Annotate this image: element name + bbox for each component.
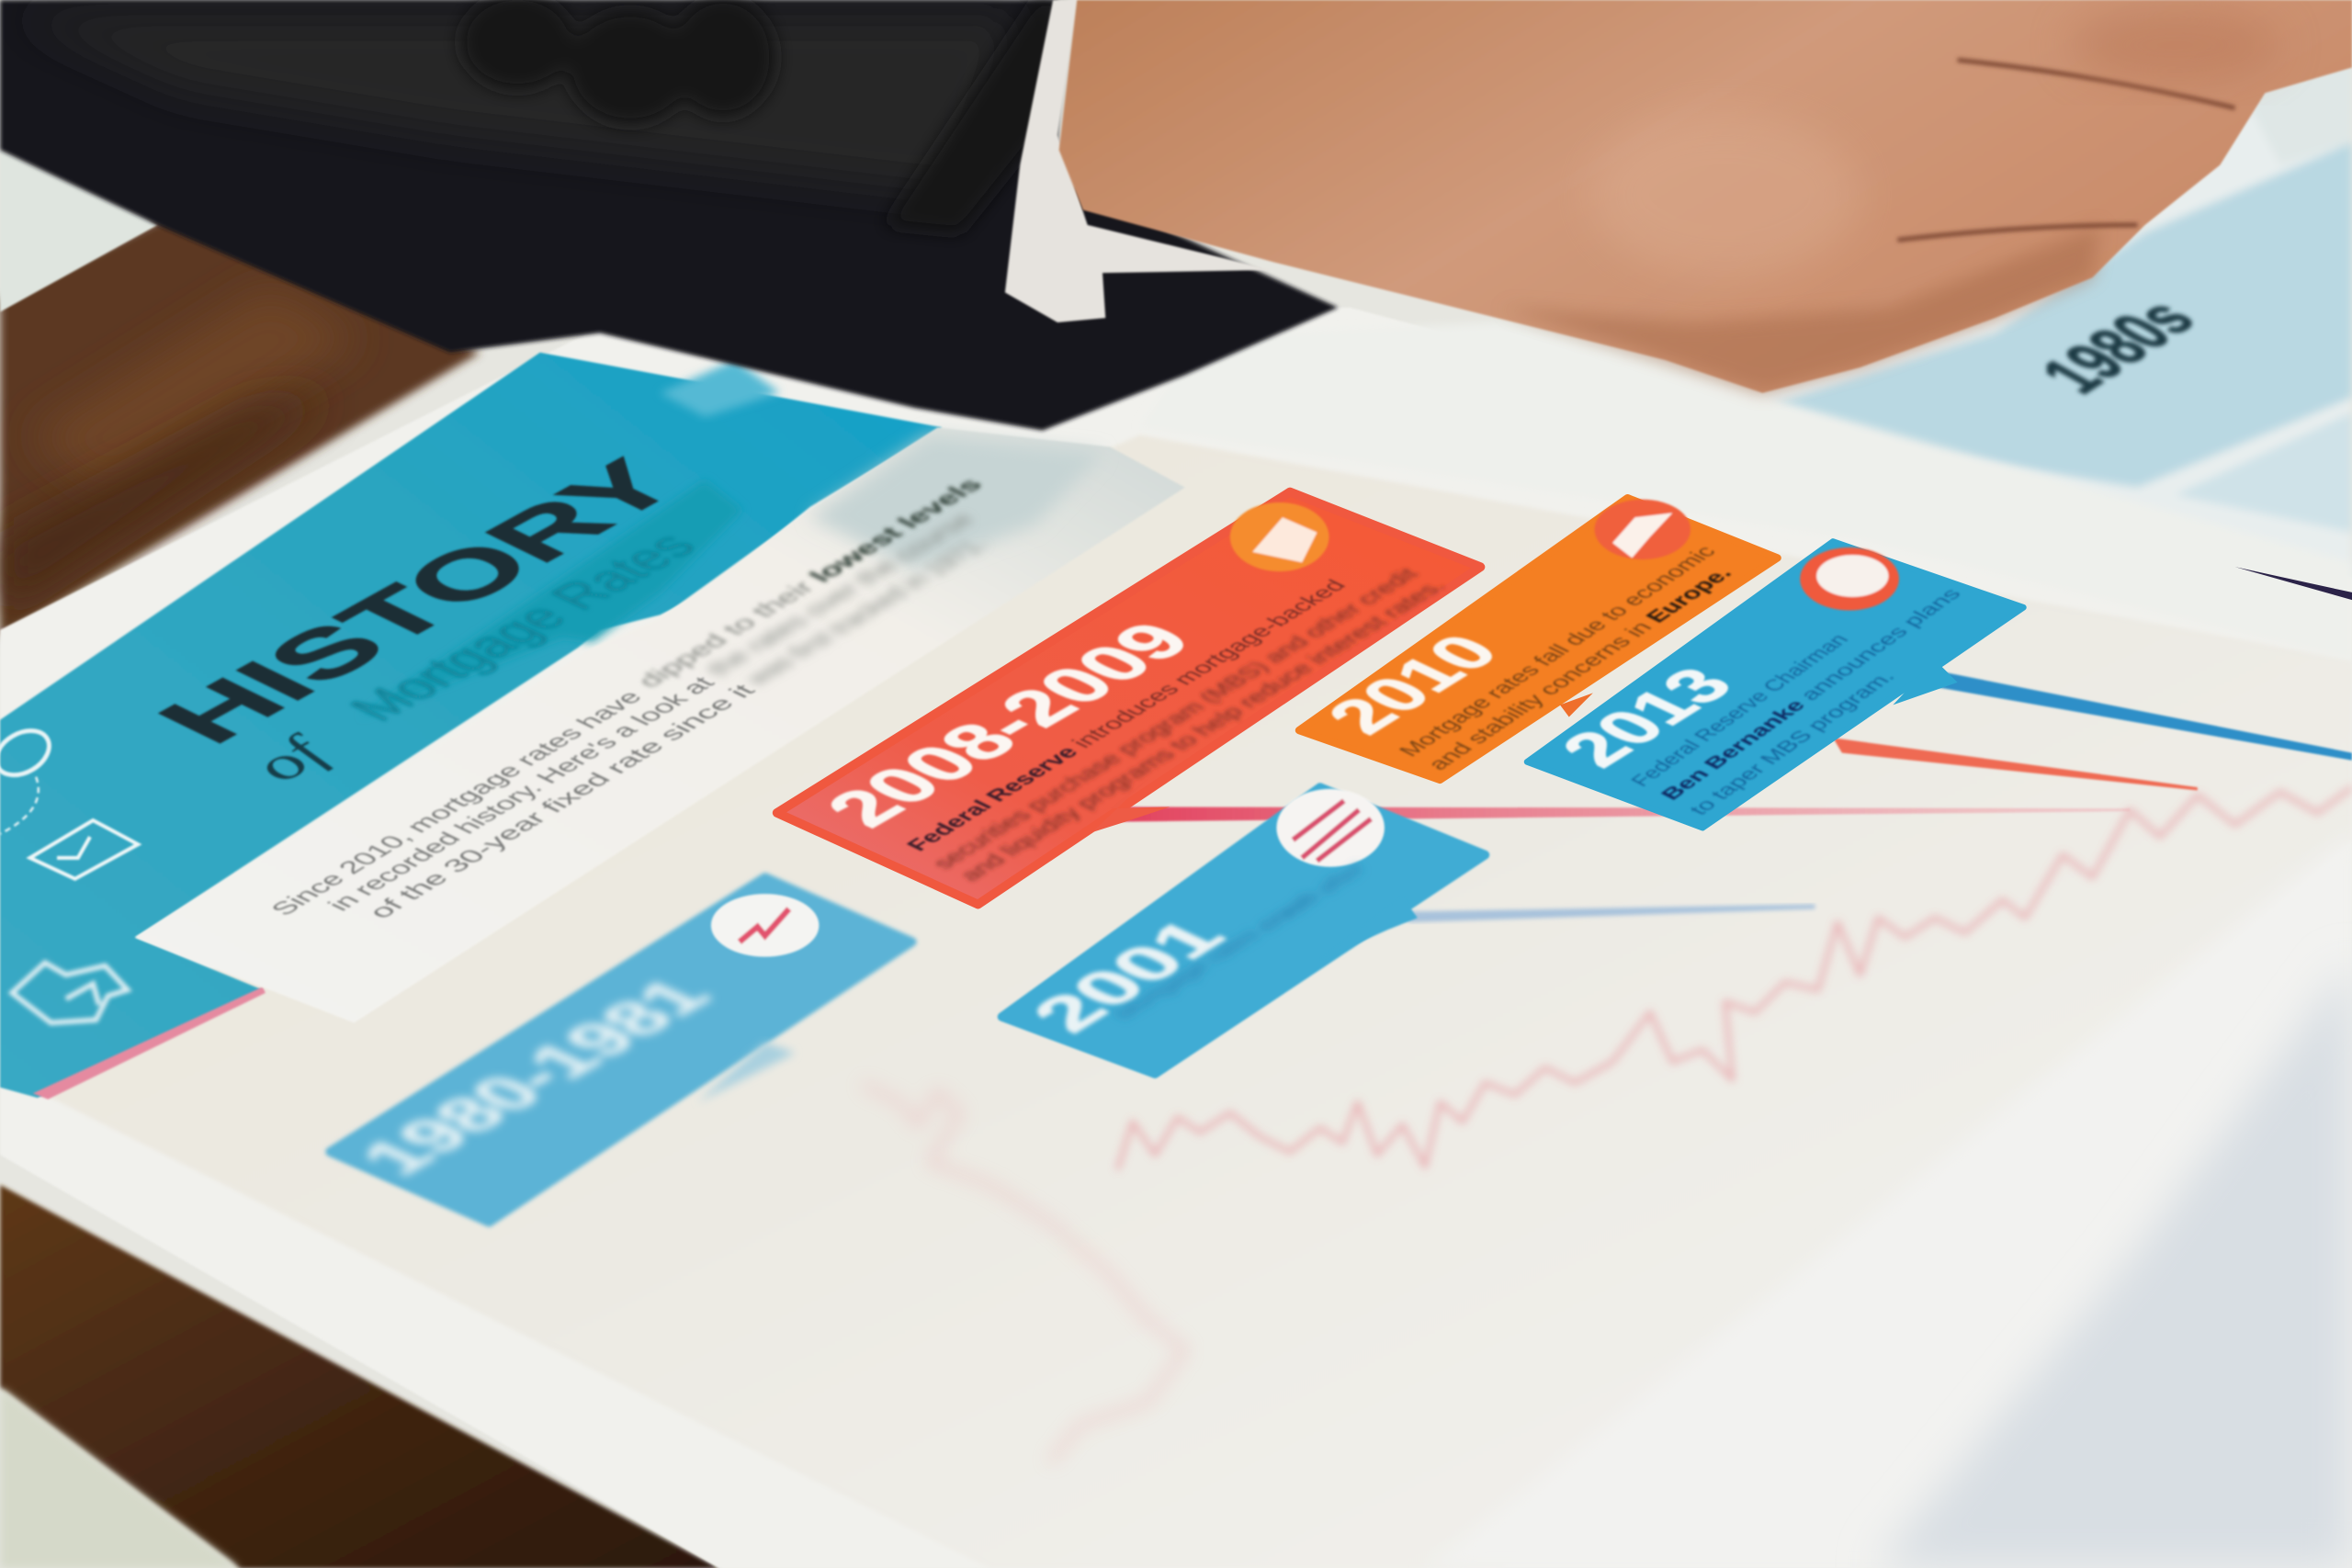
label: 1980s on second sheet: 1980s <box>2024 289 2212 404</box>
orange-red connector line <box>1833 738 2198 790</box>
card tail <box>1092 775 1170 832</box>
description 2008 line 2: securities purchase program (MBS) and other credit <box>926 565 1424 873</box>
panel: 2013 card <box>1527 541 2023 828</box>
description 2010 line 2: and stability concerns in Europe. <box>1422 565 1737 773</box>
2010 tail <box>1560 693 1593 716</box>
card tail <box>1893 660 1958 705</box>
icon: house <box>12 963 128 1023</box>
description 2008 line 1: Federal Reserve introduces mortgage-backed <box>901 577 1351 854</box>
intro line 1 end: dipped to their lowest levels <box>630 475 989 691</box>
panel: intro text box <box>135 427 1185 1023</box>
panel: 2010 card <box>1299 498 1778 780</box>
title: HISTORY: HISTORY <box>132 446 705 756</box>
intro line 2: in recorded history. Here's a look at <box>322 673 720 914</box>
pale blue connector line <box>1395 905 1815 922</box>
sleeve buttons <box>460 0 775 125</box>
card tail <box>1320 897 1418 960</box>
chart: mortgage rate line <box>863 787 2352 1462</box>
description 2010 line 1: Mortgage rates fall due to economic <box>1394 543 1722 760</box>
jacket sleeve <box>0 0 1338 431</box>
shirt cuff <box>1005 0 1272 322</box>
blurred description 2001: Mortgage rates crash after <box>1108 861 1372 1022</box>
description 2008 line 3: and liquidity programs to help reduce interest rates. <box>954 577 1452 885</box>
year 2010: 2010 <box>1310 626 1516 743</box>
year 2013: 2013 <box>1544 659 1750 776</box>
card tail <box>697 1043 795 1102</box>
intro line 3: of the 30-year fixed rate since it <box>362 681 761 922</box>
pink header edge <box>33 987 266 1100</box>
intro line 1: Since 2010, mortgage rates have <box>265 687 649 919</box>
icon: rising arrow <box>711 894 819 957</box>
panel: blue header <box>0 353 942 1100</box>
finger creases <box>1897 60 2235 240</box>
icon: chart board <box>30 820 138 879</box>
hand <box>1059 0 2352 393</box>
year 2001: 2001 <box>1014 910 1242 1042</box>
year 2008-2009: 2008-2009 <box>807 613 1210 836</box>
icon: building <box>1230 502 1329 571</box>
title: Mortgage Rates: Mortgage Rates <box>334 525 710 728</box>
icon: head silhouette <box>1800 547 1899 611</box>
blue 2013 connector line <box>1928 669 2352 761</box>
hand lower shadow <box>1500 225 2100 393</box>
mortgage rates banner <box>360 479 742 716</box>
intro line 3 end: was first tracked in 1971. <box>738 535 994 688</box>
timeline connector lines <box>1102 669 2352 922</box>
panel: 2001 card <box>1002 787 1485 1074</box>
year 1980-1981: 1980-1981 <box>342 969 728 1184</box>
panel: 1980-1981 card <box>330 877 912 1223</box>
intro line 2 end: the rates over the course <box>699 510 981 679</box>
panel: 2008-2009 card <box>777 492 1480 905</box>
description 2013 line 3: to taper MBS program. <box>1684 668 1900 818</box>
icon: american flag <box>1276 789 1385 867</box>
upper right sheet <box>1755 63 2352 600</box>
bottom right blurred page curl <box>1425 832 2352 1568</box>
red connector line <box>1102 807 2130 822</box>
description 2013 line 2: Ben Bernanke announces plans <box>1656 585 1966 803</box>
icon: europe map <box>1595 500 1690 559</box>
title: of: of <box>232 727 354 789</box>
icon: ring and dashed path <box>0 722 57 834</box>
description 2013 line 1: Federal Reserve Chairman <box>1625 631 1853 789</box>
